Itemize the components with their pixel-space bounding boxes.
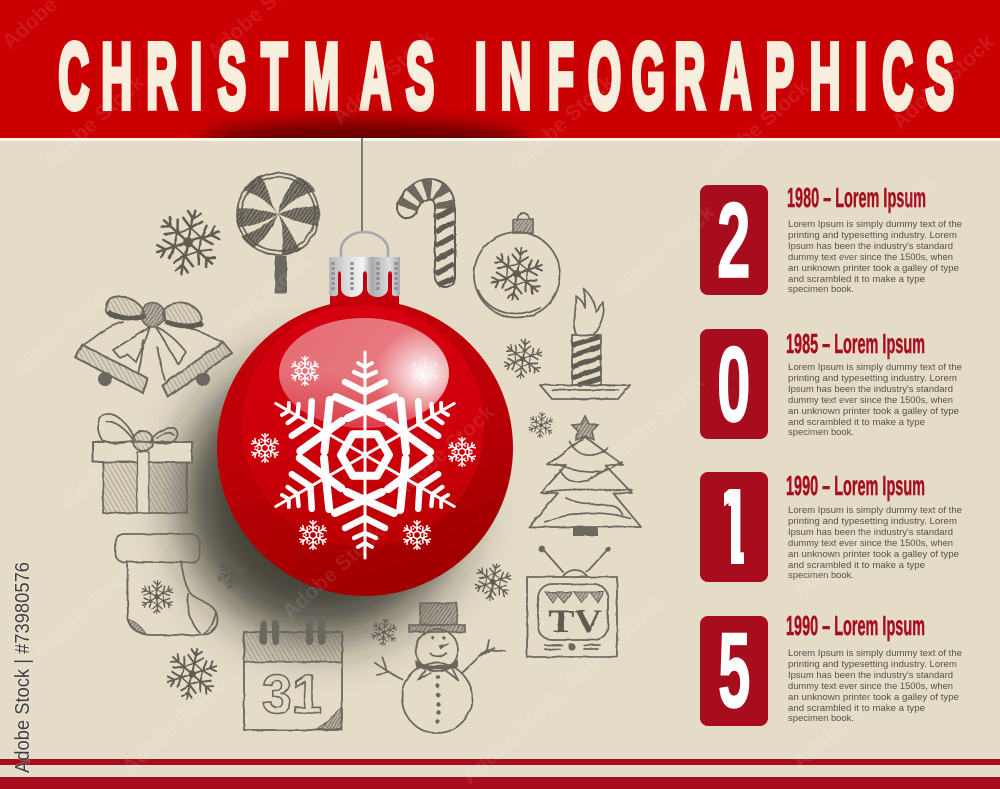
stock watermark: Adobe Stock [203, 251, 314, 354]
doodle: gift box [93, 414, 192, 513]
timeline item 1990 second [700, 610, 962, 730]
glossy highlight [279, 318, 449, 428]
timeline item 1985 [700, 324, 962, 444]
ornament drop shadow [182, 358, 462, 638]
doodle: lollipop [237, 173, 319, 294]
ornament neck [330, 268, 399, 310]
stock watermark: Adobe Stock [118, 676, 229, 779]
sketched doodles around the ornament [75, 173, 641, 733]
digit card 5: 5 [718, 610, 750, 730]
doodle: snowflake bottom left [161, 644, 223, 704]
body text 1990 second: specimen book. [788, 713, 854, 723]
small white snowflake faded [410, 356, 440, 386]
body text 1985: specimen book. [788, 427, 854, 437]
body text 1990: printing and typesetting industry. Lorem [788, 516, 957, 526]
digit card 1: 1 [710, 466, 755, 588]
digit card 5 [700, 610, 768, 730]
stock watermark: Adobe Stock [388, 401, 499, 504]
body text 1980: dummy text ever since the 1500s, when [788, 252, 953, 262]
doodle: bells [75, 296, 232, 397]
body text 1980: Lorem Ipsum is simply dummy text of the [788, 219, 962, 229]
body text 1985 [788, 362, 962, 437]
stock watermark: Adobe Stock [608, 201, 719, 304]
body text 1990 second: printing and typesetting industry. Lorem [788, 659, 957, 669]
header shadow cast above the ornament [194, 108, 536, 138]
stock watermark: Adobe Stock [8, 281, 119, 384]
stock watermark: Adobe Stock [38, 71, 149, 174]
stock watermark: Adobe Stock [788, 501, 899, 604]
stock watermark: Adobe Stock [598, 371, 709, 474]
body text 1990: specimen book. [788, 570, 854, 580]
small white snowflake [402, 520, 432, 550]
doodle: snowflake near tv [471, 560, 515, 604]
body text 1985: dummy text ever since the 1500s, when [788, 395, 953, 405]
doodle: candy cane [407, 189, 454, 285]
doodle: candle [540, 288, 630, 399]
ornament ball [217, 300, 513, 596]
body text 1980: and scrambled it to make a type [788, 274, 925, 284]
doodle: ornament sketch [474, 213, 560, 318]
doodle: calendar [244, 620, 342, 730]
body text 1980: an unknown printer took a galley of type [788, 263, 959, 273]
body text 1980: Ipsum has been the industry's standard [788, 241, 953, 251]
ornament [217, 232, 513, 596]
doodle: christmas tree [529, 416, 641, 536]
small white snowflake [298, 520, 328, 550]
digit card 2: 2 [717, 180, 750, 300]
stock watermark: Adobe Stock [28, 561, 139, 664]
small white snowflake [250, 433, 280, 463]
doodle: stocking [115, 534, 218, 635]
body text 1985: Ipsum has been the industry's standard [788, 384, 953, 394]
doodle: snowflake near candle [501, 337, 545, 381]
title: CHRISTMAS INFOGRAPHICS [58, 24, 954, 129]
body text 1985: an unknown printer took a galley of type [788, 406, 959, 416]
body text 1985: and scrambled it to make a type [788, 417, 925, 427]
big white snowflake [261, 352, 469, 558]
body text 1990 second: Lorem Ipsum is simply dummy text of the [788, 648, 962, 658]
body text 1990: an unknown printer took a galley of type [788, 549, 959, 559]
body text 1990 second: and scrambled it to make a type [788, 703, 925, 713]
stock watermark: Adobe Stock [58, 411, 169, 514]
body text 1985: printing and typesetting industry. Lorem [788, 373, 957, 383]
stock watermark: Adobe Stock [328, 26, 439, 129]
stock watermark: Adobe Stock [278, 521, 389, 624]
doodle: small snowflake [527, 411, 555, 439]
stock id label: Adobe Stock | #73980576 [12, 562, 34, 773]
body text 1990: and scrambled it to make a type [788, 560, 925, 570]
body text 1980: specimen book. [788, 284, 854, 294]
body text 1990 [788, 505, 962, 580]
ornament silver cap [329, 257, 400, 297]
digit card 0: 0 [717, 324, 750, 444]
body text 1990: Ipsum has been the industry's standard [788, 527, 953, 537]
body text 1980 [788, 219, 962, 294]
footer stripes [0, 759, 1000, 789]
stock watermark: Adobe Stock [828, 171, 939, 274]
body text 1990 second: an unknown printer took a galley of type [788, 692, 959, 702]
doodle: snowman [375, 603, 505, 733]
body text 1990: Lorem Ipsum is simply dummy text of the [788, 505, 962, 515]
header band [0, 0, 1000, 141]
stock watermark: Adobe Stock [458, 686, 569, 789]
body text 1990 second [788, 648, 962, 723]
doodle: snowflake near snowman [369, 617, 399, 647]
stock watermark: Adobe Stock [798, 341, 909, 444]
doodle: television [527, 546, 617, 657]
digit card 0 [700, 324, 768, 444]
body text 1985: Lorem Ipsum is simply dummy text of the [788, 362, 962, 372]
body text 1990 second: dummy text ever since the 1500s, when [788, 681, 953, 691]
timeline item 1990 [700, 472, 962, 582]
digit card 2 [700, 180, 768, 300]
stock watermark: Adobe Stock [788, 671, 899, 774]
small white snowflake [447, 437, 477, 467]
body text 1990 second: Ipsum has been the industry's standard [788, 670, 953, 680]
body text 1990: dummy text ever since the 1500s, when [788, 538, 953, 548]
stock watermark: Adobe Stock [703, 76, 814, 179]
ornament hook ring [341, 232, 388, 258]
doodle: snowflake top left [149, 203, 227, 281]
body text 1980: printing and typesetting industry. Lorem [788, 230, 957, 240]
stock watermark: Adobe Stock [508, 71, 619, 174]
small white snowflake [290, 356, 320, 386]
stock watermark: Adobe Stock [888, 31, 999, 134]
stock watermark: Adobe Stock [558, 591, 669, 694]
doodle: television: TV [548, 604, 602, 640]
doodle: calendar: 31 [262, 663, 322, 725]
timeline item 1980 [700, 180, 962, 300]
doodle: snowflake beside shadow [214, 557, 250, 591]
hanging string [361, 138, 363, 233]
